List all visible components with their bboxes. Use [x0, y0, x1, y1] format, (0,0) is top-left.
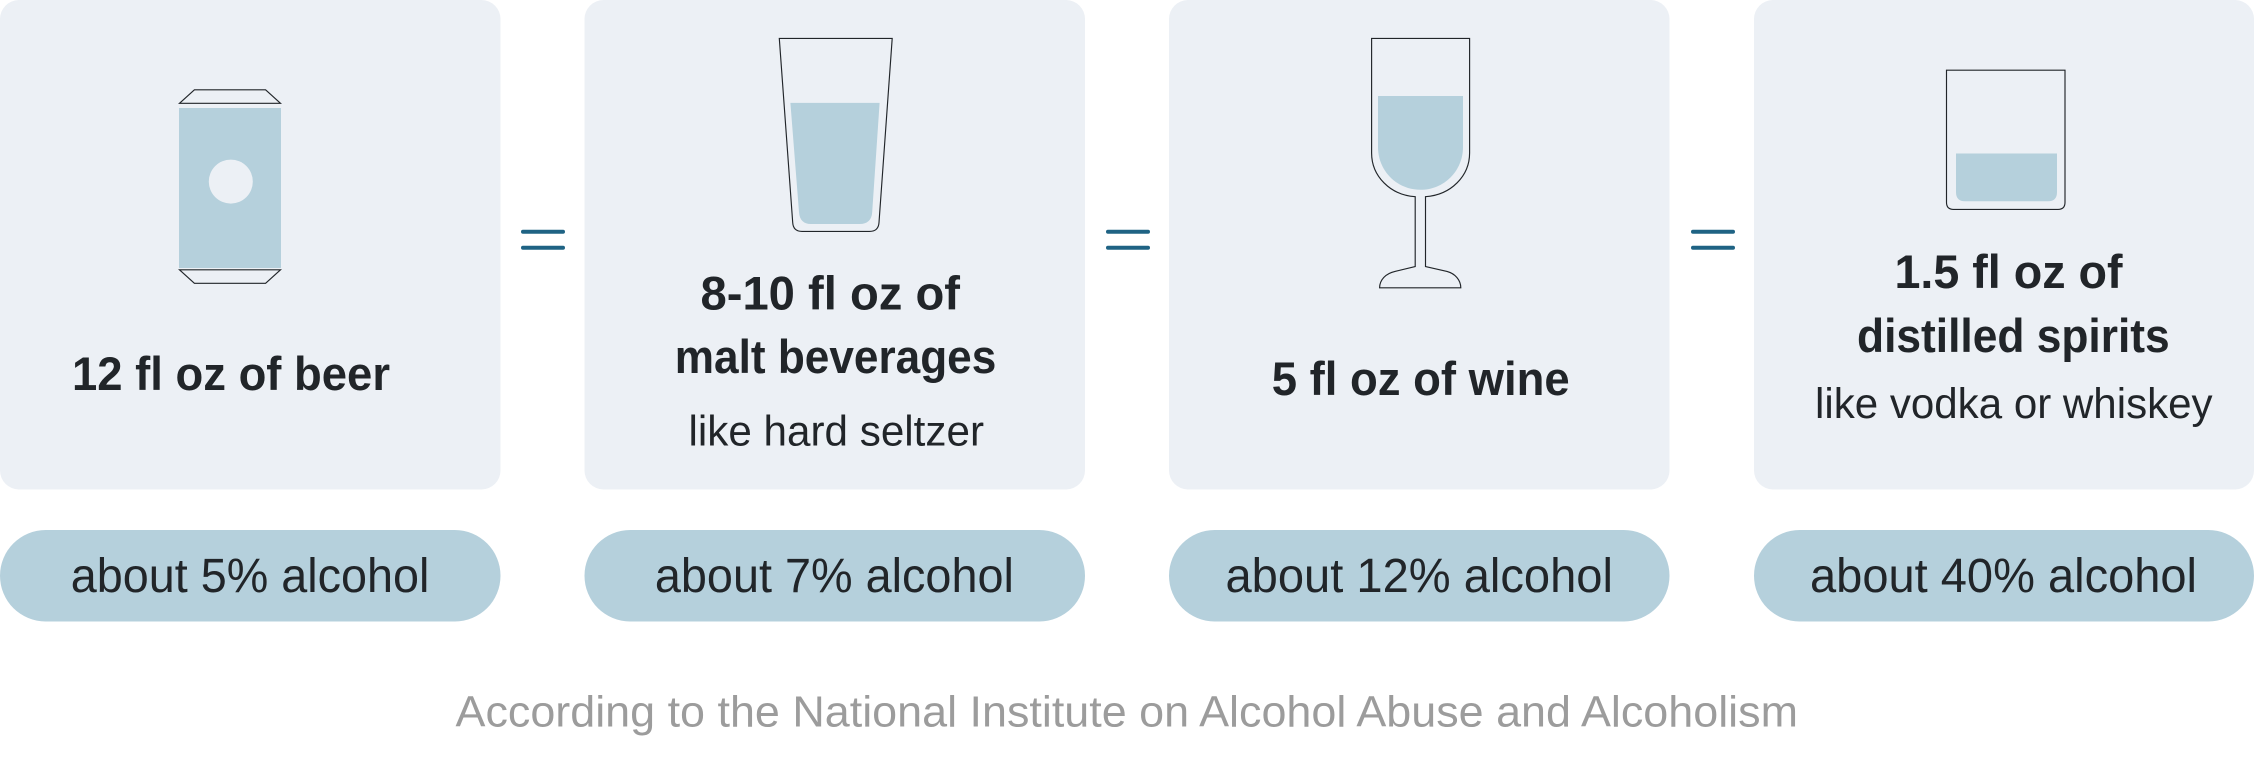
note: like hard seltzer: like hard seltzer — [688, 409, 984, 456]
pill: about 5% alcohol: about 5% alcohol — [71, 550, 429, 603]
pill: about 40% alcohol: about 40% alcohol — [1810, 550, 2197, 603]
heading: 5 fl oz of wine: 5 fl oz of wine — [1272, 352, 1570, 405]
icon: wine glass — [1372, 38, 1470, 288]
icon: pint glass — [779, 38, 892, 231]
panel: beer — [0, 0, 500, 490]
heading: 12 fl oz of beer: 12 fl oz of beer — [72, 347, 390, 400]
equals sign 2 — [1108, 232, 1148, 248]
icon: beer can — [179, 90, 281, 283]
heading: 1.5 fl oz of distilled spirits — [1857, 245, 2170, 362]
panel: wine — [1169, 0, 1670, 490]
pill: about 7% alcohol: about 7% alcohol — [655, 550, 1014, 603]
heading: 8-10 fl oz of malt beverages — [675, 266, 996, 383]
panel: distilled spirits — [1754, 0, 2254, 490]
note: like vodka or whiskey: like vodka or whiskey — [1815, 381, 2213, 428]
source note: According to the National Institute on Alcohol Abuse and Alcoholism — [456, 688, 1798, 736]
icon: rocks glass — [1946, 70, 2065, 209]
panel: malt beverages — [584, 0, 1085, 490]
equals sign 1 — [523, 232, 563, 248]
pill: about 12% alcohol: about 12% alcohol — [1226, 550, 1613, 603]
heading: 8-10 fl oz of malt beverages: 8-10 fl oz of — [700, 266, 960, 319]
heading: 1.5 fl oz of distilled spirits: 1.5 fl oz of — [1894, 245, 2123, 298]
pill: about 12% alcohol — [1169, 530, 1670, 622]
pill: about 7% alcohol — [584, 530, 1085, 622]
heading: 1.5 fl oz of distilled spirits: distilled spirits — [1857, 309, 2170, 362]
equals sign 3 — [1693, 232, 1733, 248]
heading: 8-10 fl oz of malt beverages: malt beverages — [675, 330, 996, 383]
pill: about 40% alcohol — [1754, 530, 2254, 622]
pill: about 5% alcohol — [0, 530, 500, 622]
